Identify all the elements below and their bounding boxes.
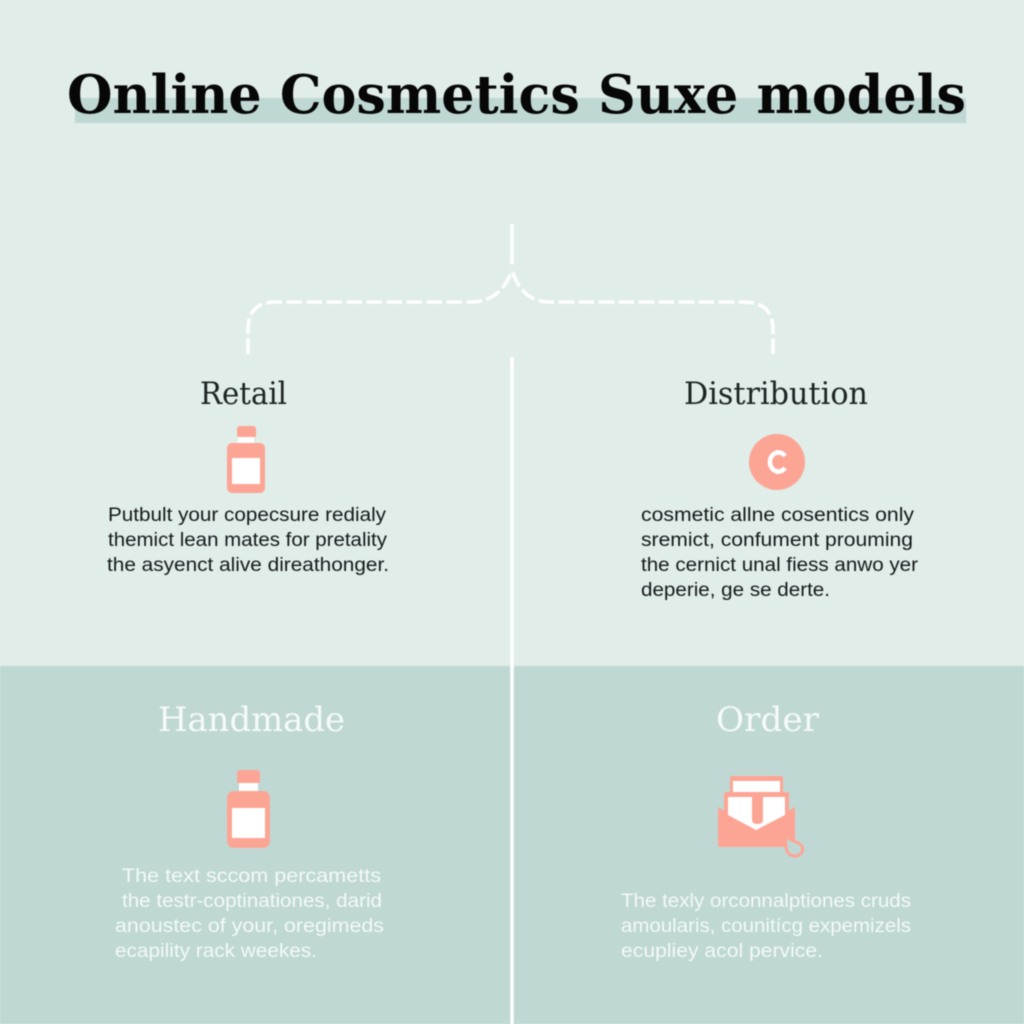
panel: Distribution — [641, 376, 919, 601]
bottom background band — [0, 666, 1024, 1024]
panel: Order — [621, 700, 911, 962]
body text: Distribution: deperie, ge se derte. — [641, 580, 830, 601]
heading: Order: Order — [716, 700, 820, 740]
heading: Retail: Retail — [200, 376, 287, 412]
body text: Retail: the asyenct alive direathonger. — [107, 555, 389, 576]
tree connector: dashed bracket and centre line — [248, 224, 773, 1024]
body text: Distribution: the cernict unal fiess anwo yer — [641, 555, 919, 576]
body text: Retail — [107, 505, 389, 576]
centre line upper segment — [510, 224, 514, 264]
body text: Order: amoularis, counitícg expemizels — [621, 916, 911, 937]
body text: Order: ecupliey acol pervice. — [621, 941, 823, 962]
body text: Order — [621, 891, 911, 962]
icon: open envelope with tag — [718, 776, 803, 856]
icon: cosmetic bottle — [227, 426, 265, 493]
centre vertical divider — [510, 357, 514, 1024]
body text: Handmade: anoustec of your, oregimeds — [115, 916, 384, 937]
top background band — [0, 0, 1024, 666]
body text: Distribution: sremict, confument prouming — [641, 530, 913, 551]
title highlight bar — [75, 98, 966, 123]
body text: Distribution — [641, 505, 919, 601]
dashed bracket left branch — [248, 270, 512, 354]
body text: Handmade: The text sccom percametts — [122, 866, 381, 887]
body text: Retail: themict lean mates for pretality — [108, 530, 388, 551]
heading: Handmade: Handmade — [158, 700, 345, 740]
panel: Handmade — [115, 700, 384, 962]
icon: coin circle — [749, 434, 805, 490]
body text: Distribution: cosmetic allne cosentics only — [641, 505, 915, 526]
panel: Retail — [107, 376, 389, 576]
dashed bracket right branch — [512, 270, 773, 354]
body text: Retail: Putbult your copecsure redialy — [108, 505, 387, 526]
body text: Handmade: ecapility rack weekes. — [115, 941, 317, 962]
title with highlight — [67, 64, 966, 126]
icon: cosmetic bottle — [227, 770, 270, 848]
body text: Order: The texly orconnalptiones cruds — [621, 891, 911, 912]
title text: Online Cosmetics Suxe models — [67, 64, 966, 126]
heading: Distribution: Distribution — [684, 376, 868, 412]
body text: Handmade — [115, 866, 384, 962]
body text: Handmade: the testr-coptinationes, darid — [122, 891, 382, 912]
